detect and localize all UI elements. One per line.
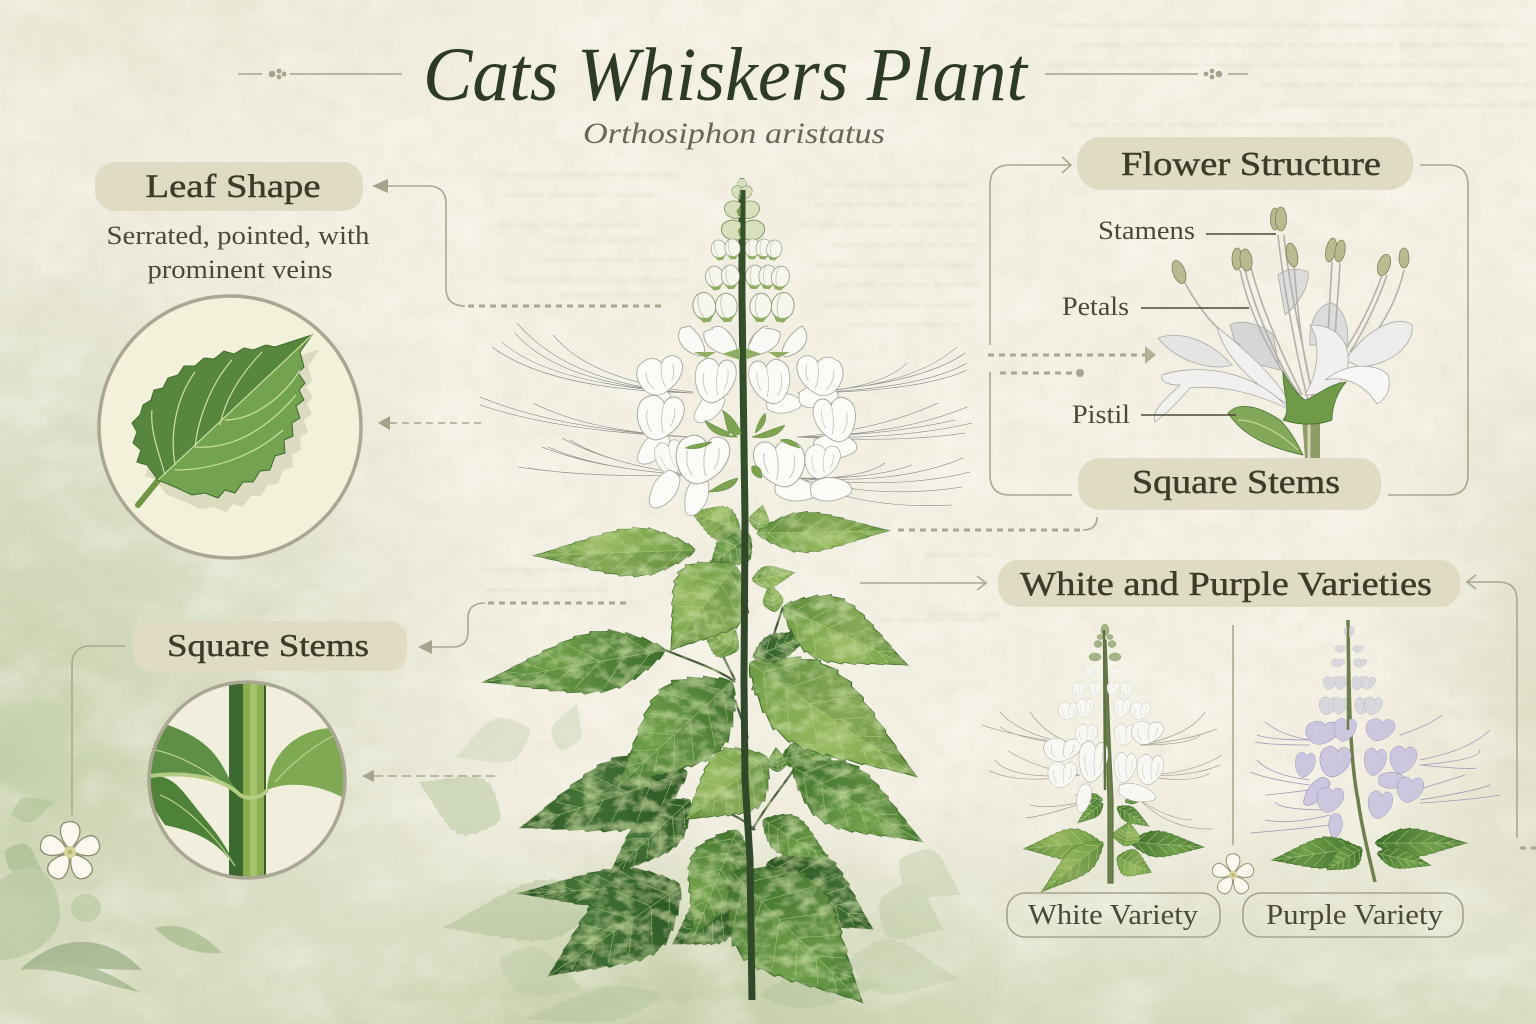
- title ornament right: [1045, 69, 1248, 79]
- icon: stem close-up in circle: [148, 680, 346, 880]
- faint background script lines: [480, 25, 1530, 620]
- title: Cats Whiskers Plant: [423, 33, 1029, 117]
- panel: varieties: [860, 560, 1536, 937]
- panel: square stems left: [133, 621, 407, 880]
- divider: [1232, 625, 1234, 845]
- connector: flower bracket: [990, 157, 1468, 495]
- heading: flower structure: Flower Structure: [1121, 146, 1381, 183]
- title ornament left: [238, 69, 402, 79]
- heading: square stems right: Square Stems: [1132, 464, 1340, 501]
- heading: leaf shape: Leaf Shape: [146, 169, 320, 205]
- text: leaf description: prominent veins: [148, 255, 332, 284]
- label: pistil: Pistil: [1072, 400, 1130, 429]
- panel: leaf shape: [95, 162, 370, 558]
- background foliage: behind main plant: [405, 698, 974, 1024]
- heading: square stems right: [1078, 458, 1381, 510]
- label: petals: Petals: [1062, 292, 1129, 321]
- background foliage: bottom left: [0, 789, 222, 992]
- icon: small flower left: [38, 822, 102, 882]
- stem over blossoms: [743, 190, 745, 520]
- plant stem: [742, 180, 752, 1000]
- tier leaflets: [685, 410, 800, 492]
- heading: flower structure: [1077, 137, 1413, 190]
- connector: right bracket arrow: [1467, 575, 1536, 848]
- illustration: white variety: [982, 624, 1222, 903]
- panel: flower structure: [988, 137, 1468, 510]
- connector: dotted arrow to flower: [988, 346, 1156, 377]
- whiskers: [480, 323, 972, 506]
- connector: leaf pointer: [378, 416, 485, 430]
- connector: left bracket to square stems: [72, 646, 125, 815]
- illustration: flower anatomy: [1154, 207, 1412, 458]
- icon: small flower center: [1211, 854, 1255, 896]
- label: purple variety: Purple Variety: [1266, 900, 1443, 931]
- label: stamens: Stamens: [1098, 216, 1195, 245]
- connector: leaf shape arrow: [372, 179, 664, 306]
- label: purple variety: [1243, 893, 1463, 937]
- connector: square stems right: [898, 517, 1097, 530]
- label: white variety: [1007, 893, 1220, 937]
- heading: varieties: [998, 560, 1460, 607]
- upper stem: [740, 178, 744, 300]
- icon: leaf in circle: [99, 296, 361, 558]
- subtitle: Orthosiphon aristatus: [583, 117, 885, 150]
- heading: leaf shape: [95, 162, 363, 211]
- text: leaf description: Serrated, pointed, with: [106, 221, 370, 250]
- heading: square stems left: Square Stems: [167, 627, 369, 663]
- connector: stem pointer: [362, 770, 496, 782]
- leaves: [477, 495, 941, 1024]
- heading: varieties: White and Purple Varieties: [1020, 566, 1432, 603]
- main plant: [477, 178, 972, 1024]
- label: white variety: White Variety: [1028, 900, 1198, 931]
- illustration: purple variety: [1250, 620, 1500, 882]
- connector: arrow from plant: [860, 576, 986, 590]
- flower buds: [678, 178, 807, 360]
- heading: square stems left: [133, 621, 407, 671]
- white blossoms: [631, 352, 859, 519]
- connector: square stems left arrow: [418, 603, 630, 654]
